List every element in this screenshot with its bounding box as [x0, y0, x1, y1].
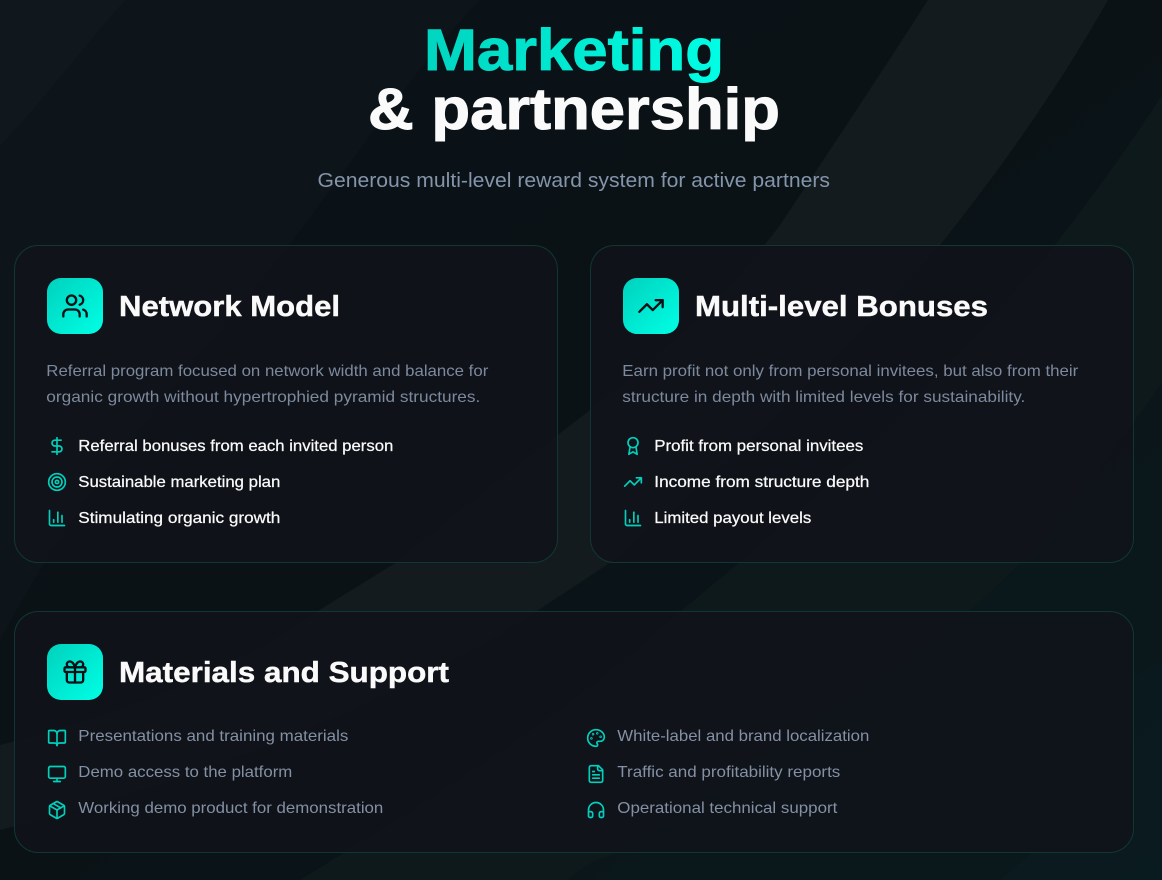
list item: demo product: Working demo product for demonstration: [78, 800, 383, 817]
heading: multi-level bonuses: Multi-level Bonuses: [695, 291, 988, 323]
icon: gift: [47, 644, 103, 700]
list item: structure depth: Income from structure depth: [654, 474, 869, 491]
description: network model: Referral program focused on network width and balance for: [46, 363, 489, 380]
description: multi-level bonuses: structure in depth with limited levels for sustainability.: [622, 389, 1025, 406]
title: & partnership: [368, 77, 780, 142]
list item: presentations: Presentations and training materials: [78, 728, 348, 745]
description: multi-level bonuses: Earn profit not only from personal invitees, but also from their: [622, 363, 1079, 380]
subtitle: Generous multi-level reward system for active partners: [318, 170, 830, 192]
list item: technical support: Operational technical support: [617, 800, 838, 817]
icon: trending up: [623, 278, 679, 334]
list item: personal invitees: Profit from personal invitees: [654, 438, 863, 455]
list item: payout levels: Limited payout levels: [654, 510, 811, 527]
list item: referral bonuses: Referral bonuses from each invited person: [78, 438, 393, 455]
panel: network model: [14, 246, 558, 562]
icon: users: [47, 278, 103, 334]
title: [368, 18, 780, 142]
list item: organic growth: Stimulating organic growth: [78, 510, 280, 527]
panel: multi-level bonuses: [590, 246, 1134, 562]
list item: sustainable plan: Sustainable marketing plan: [78, 474, 280, 491]
panel: materials and support: [14, 612, 1134, 852]
list item: reports: Traffic and profitability reports: [617, 764, 840, 781]
description: network model: organic growth without hypertrophied pyramid structures.: [46, 389, 480, 406]
heading: network model: Network Model: [119, 291, 340, 323]
list item: white-label: White-label and brand localization: [617, 728, 869, 745]
description: network model: [46, 363, 489, 406]
title: Marketing: [424, 18, 724, 83]
description: multi-level bonuses: [622, 363, 1079, 406]
heading: materials and support: Materials and Support: [119, 657, 449, 689]
list item: demo access: Demo access to the platform: [78, 764, 292, 781]
